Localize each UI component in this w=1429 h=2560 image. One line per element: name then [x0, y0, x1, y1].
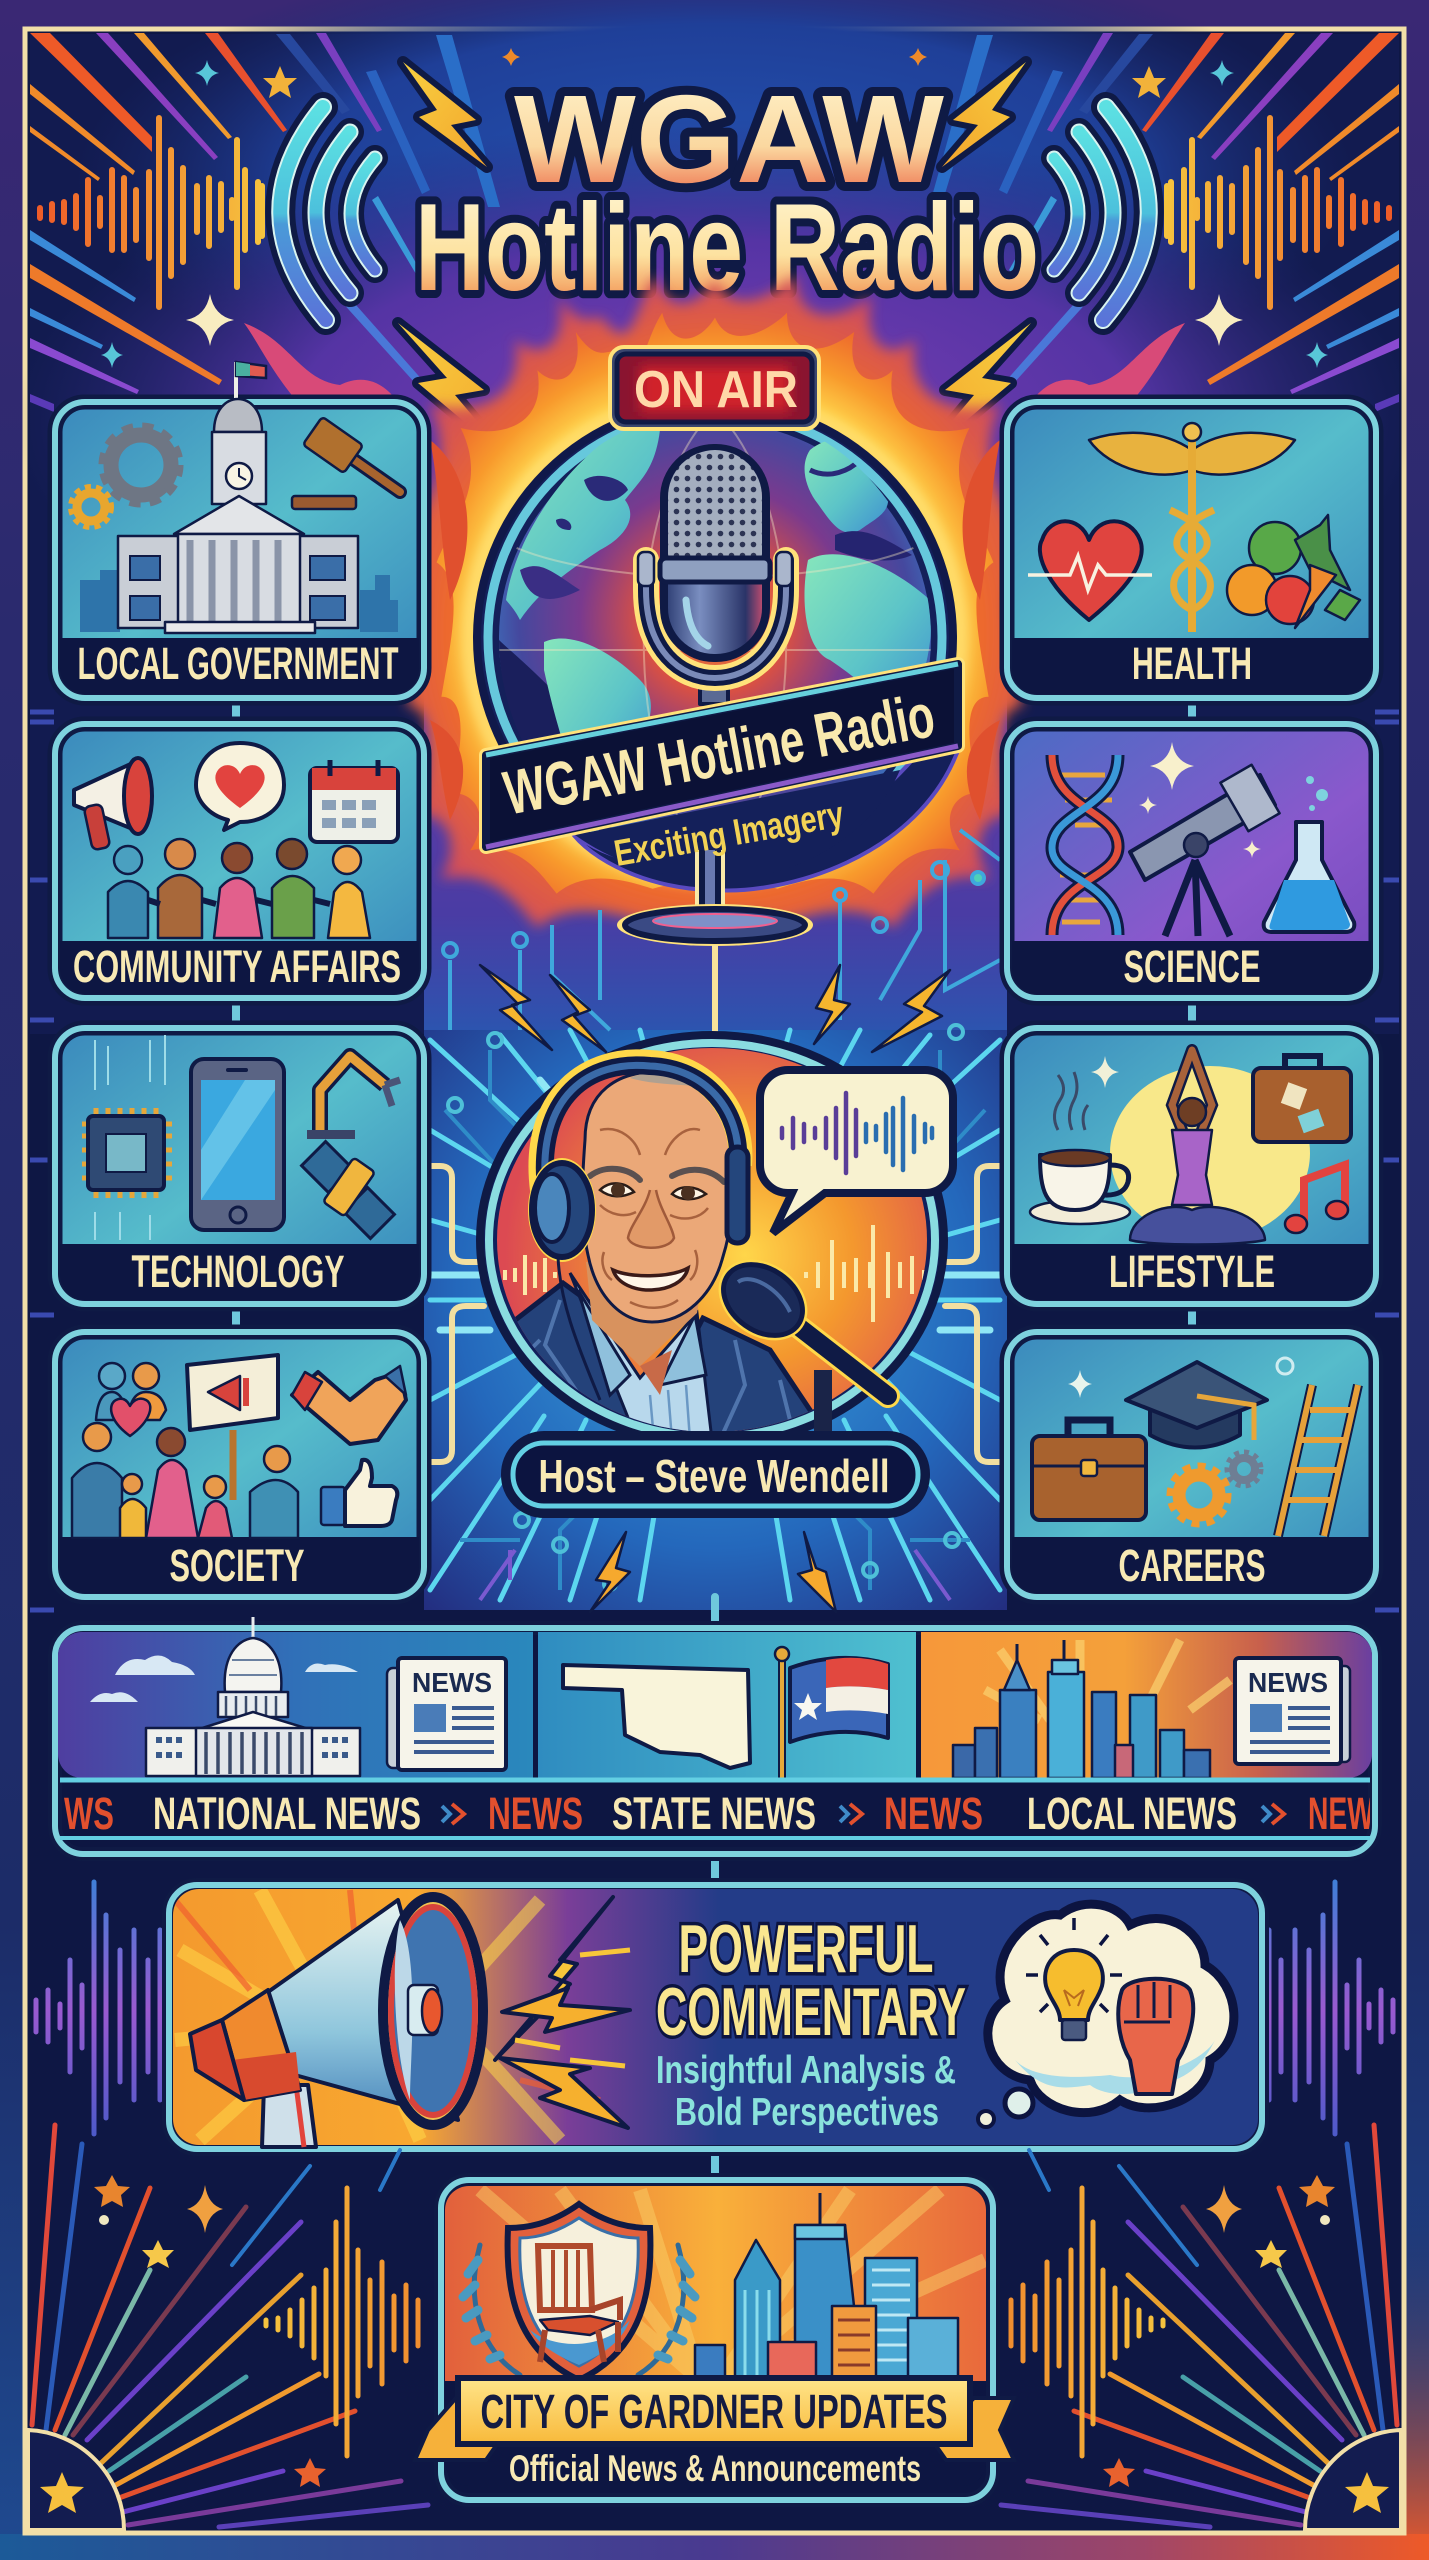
sound wave commentary right	[1269, 1882, 1393, 2134]
commentary subtitle	[656, 2049, 956, 2134]
flames behind globe	[402, 274, 1028, 928]
on air sign	[610, 347, 819, 429]
icon: capitol	[146, 1617, 360, 1776]
icon: suitcase	[1253, 1056, 1351, 1142]
panel: science	[1007, 724, 1376, 998]
ribbon banner	[415, 2378, 1014, 2460]
panel: city of gardner updates	[415, 2180, 1014, 2500]
panel: society	[55, 1332, 424, 1597]
host microphone	[703, 1243, 888, 1432]
host portrait	[480, 1035, 953, 1445]
panel: local government: LOCAL GOVERNMENT	[78, 638, 398, 689]
sound wave lower right	[1011, 2188, 1163, 2456]
ticker: LOCAL NEWS	[1027, 1788, 1237, 1839]
people holding hands	[108, 839, 370, 938]
signal arcs right	[1054, 107, 1149, 320]
icon: graduation cap	[1126, 1362, 1267, 1448]
icon: couple and heart	[96, 1363, 166, 1436]
icon: gears	[71, 427, 179, 527]
panel: health	[1007, 402, 1376, 698]
icon: thumbs up	[321, 1460, 397, 1526]
corner bursts right	[1001, 2125, 1397, 2527]
globe with microphone	[469, 347, 961, 946]
icon: shield with chair	[508, 2204, 650, 2380]
title: WGAW	[514, 70, 944, 209]
icon: heart bubble	[196, 743, 284, 830]
title: Hotline Radio	[415, 179, 1039, 317]
lightning bolts top right	[919, 62, 1031, 460]
icon: briefcase	[1032, 1420, 1146, 1520]
panel: powerful commentary	[169, 1885, 1262, 2149]
sound wave top right	[1167, 118, 1389, 307]
host name badge: Host – Steve Wendell	[538, 1450, 890, 1502]
panel: technology: TECHNOLOGY	[132, 1246, 344, 1297]
icon: newspaper	[387, 1658, 506, 1770]
ticker: NEW	[1308, 1788, 1374, 1839]
shirt	[570, 1273, 712, 1440]
banner: WGAW Hotline Radio	[499, 681, 940, 828]
panel: careers: CAREERS	[1118, 1540, 1266, 1591]
upper background glow	[15, 0, 1415, 1034]
icon: telescope	[1130, 765, 1280, 936]
icon: flag	[775, 1647, 888, 1778]
ticker arrows	[442, 1804, 1284, 1824]
skyline silhouette	[80, 570, 398, 632]
icon: heart with pulse	[1028, 521, 1152, 620]
panel: local government	[55, 362, 424, 698]
panel: science: SCIENCE	[1124, 941, 1260, 992]
icon: laurels	[463, 2245, 695, 2375]
rays around host	[430, 1025, 1000, 1600]
on air sign: ON AIR	[634, 361, 798, 419]
panel: health: HEALTH	[1132, 638, 1252, 689]
globe continents	[499, 431, 931, 830]
icon: newspaper	[1235, 1658, 1350, 1764]
sound wave commentary left	[36, 1882, 160, 2134]
thought cloud	[978, 1904, 1234, 2127]
icon: calendar	[310, 760, 398, 842]
sound wave top left	[40, 118, 262, 307]
icon: ladder	[1278, 1385, 1358, 1536]
headphones	[528, 1061, 748, 1400]
panel: news strip	[55, 1617, 1375, 1854]
panel: community affairs	[55, 724, 424, 998]
exciting imagery text: Exciting Imagery	[611, 793, 847, 874]
sound wave lower left	[266, 2188, 418, 2456]
signal arcs left	[280, 107, 375, 320]
icon: megaphone	[74, 758, 152, 850]
lightning bolts top	[398, 62, 510, 460]
icon: robot arm	[307, 1056, 400, 1139]
panel: lifestyle: LIFESTYLE	[1109, 1246, 1275, 1297]
icon: satellite	[302, 1142, 394, 1238]
commentary subtitle: Insightful Analysis &	[656, 2049, 956, 2092]
jacket	[515, 1280, 813, 1431]
icon: sign with megaphone	[187, 1355, 278, 1500]
purple backdrop below flames	[424, 620, 1007, 1040]
corner badge right	[1305, 2430, 1401, 2530]
icon: coffee cup	[1030, 1072, 1130, 1224]
family figures	[72, 1423, 298, 1538]
icon: gears	[1170, 1452, 1261, 1524]
circuit lines below globe	[443, 830, 1000, 1045]
lightning bolts under globe	[480, 965, 950, 1052]
commentary title	[656, 1911, 966, 2050]
icon: city skyline	[695, 2193, 958, 2378]
banner	[486, 664, 958, 847]
ticker: NATIONAL NEWS	[153, 1788, 421, 1839]
icon: vegetables	[1227, 515, 1360, 628]
icon: yoga figure	[1130, 1050, 1265, 1244]
ticker: WS	[64, 1788, 114, 1839]
stars top right	[909, 48, 1328, 368]
ticker: STATE NEWS	[612, 1788, 816, 1839]
corner badges	[28, 2430, 124, 2530]
title	[415, 70, 1039, 317]
ticker	[60, 1780, 1374, 1839]
icon: local skyline	[953, 1640, 1210, 1778]
commentary subtitle: Bold Perspectives	[675, 2091, 939, 2134]
icon: light bulb	[1026, 1918, 1122, 2040]
lightning bolts	[495, 1897, 630, 2128]
decorative rays left	[30, 33, 500, 1610]
icon: microchip	[82, 1108, 172, 1198]
microphone	[638, 448, 792, 704]
icon: phone	[191, 1059, 284, 1230]
stars top	[101, 48, 520, 368]
courthouse	[118, 362, 358, 633]
icon: newspaper: NEWS	[412, 1667, 492, 1698]
icon: megaphone	[190, 1897, 483, 2147]
icon: newspaper: NEWS	[1248, 1667, 1328, 1698]
city subtitle: Official News & Announcements	[509, 2448, 921, 2489]
host name badge	[506, 1436, 925, 1513]
panel: careers	[1007, 1332, 1376, 1597]
clouds	[90, 1655, 358, 1702]
sun disc	[1110, 1066, 1310, 1240]
panel: technology	[55, 1028, 424, 1304]
speech bubble with waveform	[760, 1070, 953, 1233]
neck	[586, 1260, 706, 1366]
icon: sparkles	[1139, 742, 1261, 858]
central blue backdrop	[424, 1030, 1007, 1610]
icon: DNA	[1052, 755, 1118, 935]
news imagery sections	[58, 1632, 1372, 1782]
icon: oklahoma outline	[563, 1665, 750, 1768]
icon: flask	[1264, 776, 1354, 932]
commentary title: POWERFUL	[678, 1911, 934, 1987]
ticker: NEWS	[884, 1788, 983, 1839]
city backdrop	[445, 2186, 986, 2381]
ticker: NEWS	[488, 1788, 583, 1839]
icon: music note	[1285, 1165, 1348, 1233]
icon: handshake	[292, 1366, 406, 1444]
icon: gavel	[292, 417, 400, 509]
icon: caduceus	[1089, 423, 1295, 632]
lower globe rim	[570, 745, 960, 946]
commentary title: COMMENTARY	[656, 1974, 966, 2050]
panel: community affairs: COMMUNITY AFFAIRS	[73, 941, 401, 992]
panel: lifestyle	[1007, 1028, 1376, 1304]
connectors	[236, 698, 1192, 2180]
head	[582, 1072, 734, 1322]
panel: society: SOCIETY	[170, 1540, 304, 1591]
corner bursts left	[32, 2125, 428, 2527]
icon: fist	[1118, 1979, 1193, 2094]
ribbon banner: CITY OF GARDNER UPDATES	[480, 2386, 948, 2439]
lightning bolts under host	[590, 1532, 836, 1612]
